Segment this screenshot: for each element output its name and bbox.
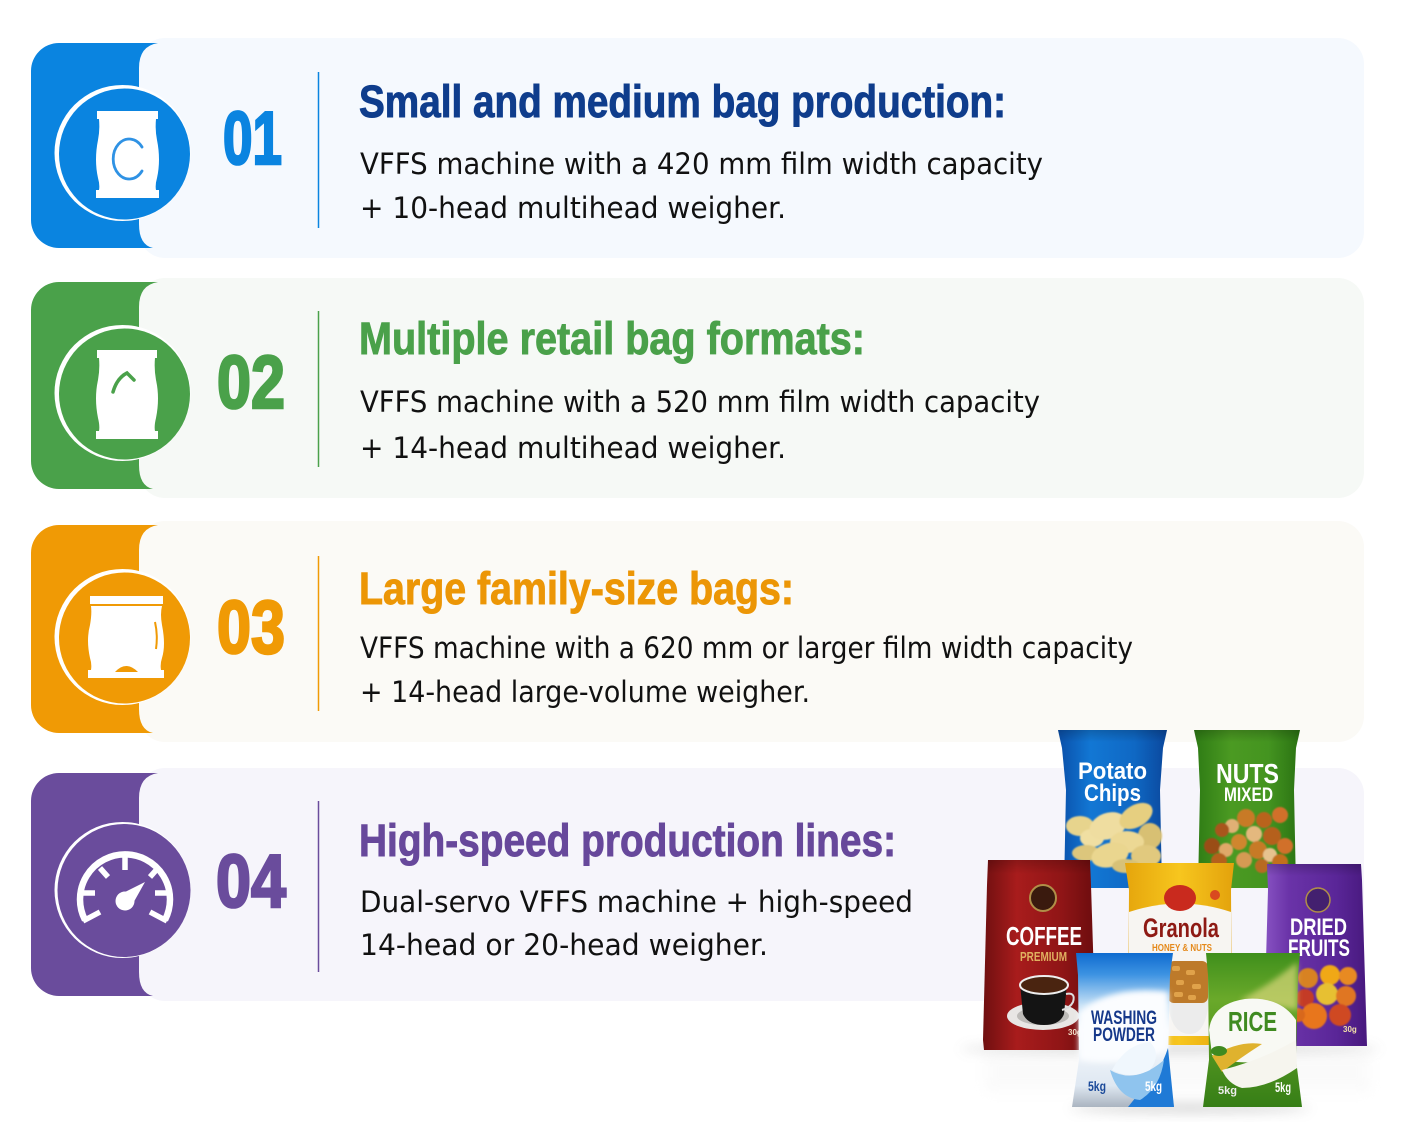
description: + 14-head multihead weigher. [360, 431, 786, 465]
icon: speedometer in circle [54, 822, 190, 958]
description: Dual-servo VFFS machine + high-speed [360, 885, 913, 919]
bag: washing powder: WASHING [1091, 1008, 1157, 1029]
bag: granola: HONEY & NUTS [1152, 943, 1212, 954]
bag: washing powder [1072, 953, 1174, 1107]
bag: rice: 5kg [1218, 1085, 1237, 1097]
bag: potato chips [1058, 730, 1167, 888]
coffee cup [1007, 976, 1079, 1030]
bag: nuts mixed: MIXED [1224, 785, 1273, 806]
bag: granola [1125, 863, 1234, 1045]
heading: High-speed production lines: [359, 815, 896, 866]
bag: coffee: COFFEE [1006, 921, 1082, 951]
bag: washing powder: POWDER [1093, 1025, 1155, 1046]
panel: high-speed production lines [31, 768, 1364, 1001]
description: VFFS machine with a 520 mm film width capacity [360, 385, 1040, 419]
bag: potato chips: Chips [1084, 780, 1141, 807]
bag: rice [1203, 953, 1302, 1107]
bag: dried fruits: DRIED [1290, 914, 1347, 941]
tab: orange [31, 525, 158, 733]
bag: granola: Granola [1143, 913, 1220, 943]
bag: coffee: 30g [1068, 1028, 1082, 1037]
bag: potato chips: Potato [1078, 758, 1147, 785]
tab: blue [31, 43, 158, 248]
bowl of granola [1168, 961, 1209, 1034]
description [360, 147, 1043, 225]
bag: coffee: PREMIUM [1020, 949, 1067, 964]
description: 14-head or 20-head weigher. [360, 928, 768, 962]
description [360, 385, 1040, 465]
icon: large bag in circle [54, 569, 190, 705]
bag: coffee [983, 860, 1096, 1050]
tab: purple [31, 773, 158, 996]
product bags group [960, 730, 1380, 1112]
bag: rice: 5kg [1275, 1079, 1291, 1095]
icon: bag with C in circle [54, 85, 190, 221]
number 02: 02 [217, 340, 285, 424]
description: + 14-head large-volume weigher. [360, 675, 810, 709]
bag: nuts mixed [1194, 730, 1300, 888]
panel: multiple retail bag formats [31, 278, 1364, 498]
bag: nuts mixed: NUTS [1216, 758, 1279, 789]
description [360, 631, 1133, 709]
description: VFFS machine with a 620 mm or larger film width capacity [360, 631, 1133, 665]
bag: washing powder: 5kg [1088, 1078, 1106, 1094]
description: VFFS machine with a 420 mm film width capacity [360, 147, 1043, 181]
bag: washing powder: 5kg [1145, 1078, 1162, 1094]
tab: green [31, 282, 158, 489]
icon: bag in circle [54, 325, 190, 461]
bag: rice: RICE [1228, 1006, 1277, 1037]
heading: Large family-size bags: [359, 563, 794, 614]
number 04: 04 [216, 839, 286, 923]
bag: dried fruits [1263, 864, 1367, 1046]
heading: Multiple retail bag formats: [359, 313, 865, 364]
bag: dried fruits: FRUITS [1288, 935, 1350, 962]
bag: dried fruits: 30g [1343, 1025, 1357, 1034]
description: + 10-head multihead weigher. [360, 191, 786, 225]
heading: Small and medium bag production: [359, 76, 1006, 127]
description [360, 885, 913, 962]
panel: small and medium bag production [31, 38, 1364, 258]
panel: large family-size bags [31, 521, 1364, 742]
number 03: 03 [217, 585, 285, 669]
number 01: 01 [223, 96, 282, 180]
